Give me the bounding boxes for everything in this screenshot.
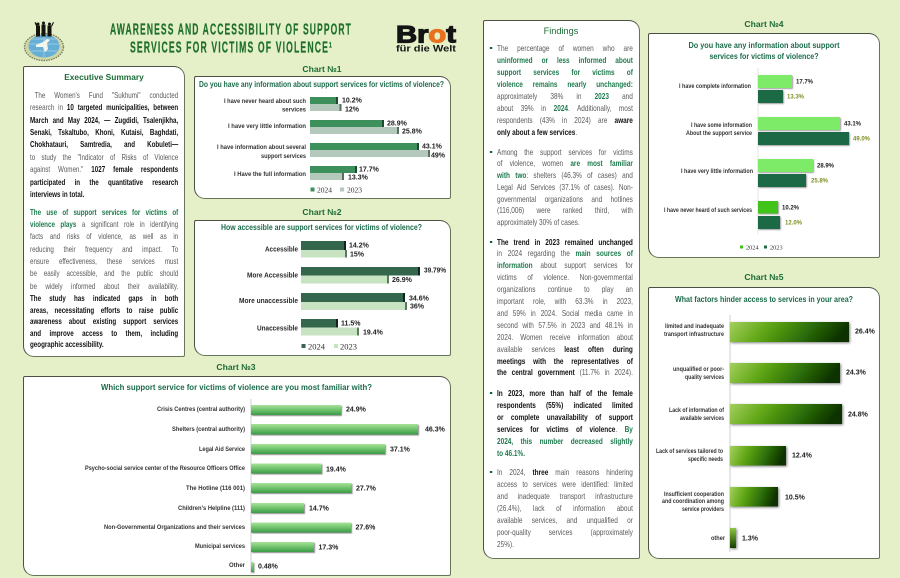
values: chart 1: 49% — [431, 153, 446, 160]
text: study gaps: areas, necessitating efforts to raise public — [30, 306, 178, 315]
category labels: chart 3: The Hotline (116 001) — [186, 486, 245, 492]
text: study gaps: geographic accessibility. — [30, 340, 104, 349]
category labels: chart 3: Legal Aid Service — [199, 447, 246, 453]
finding 2 — [490, 148, 633, 227]
category labels: chart 4: About the support service — [686, 131, 753, 137]
text: introduction: Chokhatauri, Samtredia, and Kobuleti— — [30, 140, 178, 149]
finding 3: available services least often during — [497, 345, 633, 354]
finding 1: support services for victims of — [497, 68, 633, 76]
panel: chart 1 — [194, 76, 451, 199]
panel: chart 4 — [648, 33, 880, 258]
heading: chart 3: Chart №3 — [216, 362, 256, 372]
category labels: chart 3: Shelters (central authority) — [172, 427, 245, 433]
values: chart 1 — [342, 98, 446, 182]
values: chart 5: 10.5% — [785, 495, 806, 502]
values: chart 2: 11.5% — [341, 320, 361, 328]
panel: chart 2 — [194, 220, 451, 356]
values: chart 3: 0.48% — [258, 564, 279, 571]
category labels: chart 5: available services — [680, 416, 725, 422]
values: chart 5: 24.3% — [846, 370, 867, 377]
category labels: chart 5: specific needs — [688, 457, 724, 463]
values: chart 5: 1.3% — [742, 536, 759, 543]
values: chart 3: 27.7% — [356, 486, 377, 493]
legend: chart 2: 2023 — [340, 342, 357, 352]
category labels: chart 3: Psycho-social service center of the Resource Officers Office — [85, 466, 246, 472]
logo: Brot für die Welt: Brot — [396, 22, 456, 48]
values: chart 4: 10.2% — [782, 205, 800, 211]
text: study gaps: and improve access to them, including — [30, 329, 178, 338]
legend: chart 4: 2024 — [746, 244, 759, 251]
category labels: chart 2: More Accessible — [247, 270, 298, 280]
finding 4: services for victims of violence. By — [497, 424, 633, 434]
values: chart 3: 17.3% — [318, 545, 339, 552]
text: introduction: against Women." 1027 female respondents — [30, 165, 178, 174]
text: use of support services: facts and risks of violence, as well as in — [30, 232, 178, 241]
finding 4: In 2023, more than half of the female — [497, 388, 633, 398]
category labels: chart 1: services — [282, 107, 307, 113]
values: chart 1: 10.2% — [342, 98, 363, 105]
panel: chart 3 — [23, 376, 451, 576]
category labels: chart 1: I Have the full information — [234, 172, 306, 178]
finding 1: uninformed or less informed about — [497, 56, 633, 64]
finding 1: only about a few services. — [497, 128, 577, 136]
legend: chart 1: 2023 — [347, 186, 362, 194]
finding 5: available services, and unqualified or — [497, 516, 633, 524]
values: chart 1: 13.3% — [348, 175, 369, 182]
legend: chart 2: 2024 — [308, 342, 326, 352]
category labels: chart 5: Insufficient cooperation — [664, 492, 724, 498]
text: use of support services: The use of support services for victims of — [30, 208, 178, 217]
values: chart 1: 43.1% — [422, 144, 443, 151]
finding 4 — [490, 388, 633, 458]
finding 3: meetings with the representatives of — [497, 357, 633, 366]
finding 3: important role, with 63.3% in 2023, — [497, 297, 633, 306]
values: chart 5: 26.4% — [855, 329, 876, 336]
category labels: chart 1: support services — [261, 154, 307, 160]
finding 5: (26.4%), lack of information about — [497, 504, 633, 512]
panel: chart 5: What factors hinder access to services in your area? — [675, 295, 853, 304]
heading: chart 2: Chart №2 — [302, 207, 342, 217]
category labels: chart 3: Non-Governmental Organizations and their services — [104, 525, 246, 531]
values: chart 4: 49.0% — [853, 136, 871, 142]
bars: chart 4 — [758, 75, 849, 229]
panel: chart 5 — [648, 287, 880, 559]
values: chart 3: 46.3% — [425, 427, 446, 434]
heading: executive summary: Executive Summary — [64, 72, 144, 82]
finding 1: approximately 38% in 2023 and — [497, 92, 633, 100]
panel: chart 4: services for victims of violence? — [710, 52, 819, 61]
values: chart 4: 43.1% — [844, 121, 862, 127]
values: chart 2: 39.79% — [424, 268, 447, 274]
values: chart 2: 15% — [350, 252, 365, 258]
finding 1 — [490, 44, 633, 136]
values: chart 2: 19.4% — [363, 330, 384, 336]
finding 5: access to services were identified: limited — [497, 480, 633, 488]
category labels: chart 5: other — [711, 536, 726, 542]
finding 1: about 39% in 2024. Additionally, most — [497, 104, 633, 112]
text: use of support services: violence plays a significant role in identifying — [30, 220, 178, 229]
bars: chart 1 — [310, 97, 430, 180]
finding 5: poor-quality services (approximately — [497, 528, 633, 536]
category labels: chart 5: Lack of information of — [669, 408, 725, 414]
finding 3: The trend in 2023 remained unchanged — [497, 238, 633, 246]
finding 5 — [490, 468, 633, 548]
category labels: chart 4 — [664, 84, 753, 214]
panel: chart 1: Do you have any information about support services for victims of violence? — [199, 80, 444, 89]
heading: findings: Findings — [544, 26, 578, 36]
values: chart 4: 25.8% — [811, 178, 829, 184]
values: chart 4: 12.0% — [785, 220, 803, 226]
values: chart 4: 17.7% — [796, 79, 814, 85]
finding 5: 25%). — [497, 540, 514, 548]
text: study gaps: The study has indicated gaps in both — [30, 294, 178, 303]
bars: chart 2 — [301, 241, 420, 336]
values: chart 3: 19.4% — [326, 467, 347, 474]
values: chart 1: 12% — [345, 107, 360, 114]
values: chart 5 — [742, 329, 876, 543]
finding 1: respondents (43% in 2024) are aware — [497, 116, 633, 124]
legend: chart 4 — [740, 244, 783, 251]
text: use of support services: ensure effectiveness, these services must — [30, 257, 178, 266]
category labels: chart 5 — [656, 324, 726, 542]
legend: chart 4: 2023 — [770, 244, 783, 251]
category labels: chart 1: I have never heard about such — [224, 99, 306, 105]
finding 4: 2024, this number decreased slightly — [497, 436, 633, 446]
values: chart 2: 14.2% — [349, 242, 370, 250]
values: chart 2: 36% — [410, 304, 425, 310]
text: study gaps: awareness about existing support services — [30, 317, 178, 326]
finding 5: and inadequate transport infrastructure — [497, 492, 633, 500]
finding 3: in 2024 regarding the main sources of — [497, 249, 633, 258]
heading: chart 4: Chart №4 — [744, 19, 784, 29]
text: use of support services: reducing their frequency and impact. To — [30, 245, 178, 254]
title — [110, 22, 352, 56]
category labels: chart 1 — [217, 99, 307, 178]
finding 3: 2024. Women receive information about — [497, 333, 633, 342]
text: introduction: interviews in total. — [30, 190, 84, 199]
finding 4: or complete unavailability of support — [497, 412, 633, 422]
text: introduction: The Women's Fund "Sukhumi" conducted — [35, 91, 178, 100]
finding 3 — [490, 238, 633, 377]
finding 2: (116,006) were ranked third, with — [497, 206, 633, 215]
values: chart 3: 37.1% — [390, 447, 411, 454]
finding 3: second with 57.5% in 2023 and 48.1% in — [497, 321, 633, 330]
category labels: chart 3 — [85, 407, 246, 569]
legend: chart 1: 2024 — [317, 186, 332, 194]
category labels: chart 2: Accessible — [265, 244, 298, 254]
category labels: chart 3: Municipal services — [195, 544, 246, 550]
finding 1: The percentage of women who are — [497, 44, 633, 52]
text: introduction: to study the "Indicator of Risks of Violence — [30, 153, 178, 162]
finding 2: Among the support services for victims — [497, 148, 633, 156]
category labels: chart 2 — [239, 244, 298, 332]
category labels: chart 4: I have very little information — [681, 169, 753, 175]
values: chart 4 — [782, 79, 871, 226]
bars: chart 5 — [730, 322, 849, 548]
values: chart 1: 17.7% — [359, 167, 380, 174]
category labels: chart 2: Unaccessible — [257, 324, 298, 332]
logo: Brot für die Welt: für die Welt — [396, 44, 456, 54]
values: chart 3: 27.6% — [356, 525, 376, 532]
legend: chart 2 — [302, 342, 357, 352]
category labels: chart 5: and coordination among — [662, 499, 724, 505]
values: chart 4: 28.9% — [817, 163, 835, 169]
finding 3: and 59% in 2024. Social media came in — [497, 309, 633, 318]
finding 2: with two: shelters (46.3% of cases) and — [497, 171, 633, 180]
category labels: chart 3: Children's Helpline (111) — [178, 506, 245, 512]
values: chart 1: 25.8% — [402, 129, 423, 136]
values: chart 5: 12.4% — [792, 453, 813, 460]
legend: chart 1 — [310, 186, 362, 194]
text: introduction: Senaki, Tskaltubo, Khoni, Kutaisi, Baghdati, — [30, 128, 178, 137]
panel: chart 3: Which support service for victims of violence are you most familiar with? — [101, 383, 372, 392]
category labels: chart 4: I have never heard of such services — [664, 208, 753, 214]
logo: Women's Fund Sukhumi — [24, 22, 64, 62]
text: introduction: March and May 2024, — Zugdidi, Tsalenjikha, — [30, 116, 178, 125]
text: use of support services: be widely informed about their availability. — [30, 282, 178, 291]
finding 3: information about support services for — [497, 261, 633, 270]
text: study gaps — [30, 294, 178, 349]
category labels: chart 2: More unaccessible — [239, 296, 298, 305]
text: introduction: participated in the quantitative research — [30, 178, 178, 187]
finding 2: governmental organizations and hotlines — [497, 195, 633, 204]
panel: executive summary — [23, 66, 185, 357]
category labels: chart 5: service providers — [682, 507, 725, 513]
category labels: chart 5: unqualified or poor- — [673, 367, 724, 373]
values: chart 4: 13.3% — [787, 94, 805, 100]
values: chart 3: 14.7% — [309, 506, 330, 513]
bars: chart 3 — [251, 405, 418, 572]
text: use of support services — [30, 208, 178, 291]
values: chart 5: 24.8% — [848, 412, 869, 419]
values: chart 3: 24.9% — [346, 407, 367, 414]
text: use of support services: be easily accessible, and the public should — [30, 269, 178, 278]
finding 2: Legal Aid Services (37.1% of cases). Non- — [497, 183, 633, 192]
category labels: chart 5: limited and inadequate — [665, 324, 725, 330]
finding 3: victims of violence. Non-governmental — [497, 273, 633, 282]
values: chart 3 — [258, 407, 446, 571]
category labels: chart 1: I have information about several — [217, 145, 306, 151]
finding 2: of violence, women are most familiar — [497, 159, 633, 168]
category labels: chart 5: Lack of services tailored to — [656, 449, 723, 455]
category labels: chart 1: I have very little information — [228, 124, 306, 130]
text: introduction: research in 10 targeted municipalities, between — [30, 103, 178, 112]
finding 1: violence remains nearly unchanged: — [497, 80, 633, 88]
category labels: chart 5: quality services — [685, 375, 725, 381]
finding 2: approximately 30% of cases. — [497, 218, 580, 227]
panel: findings — [483, 20, 640, 559]
finding 4: respondents (55%) indicated limited — [497, 400, 633, 410]
panel: chart 2: How accessible are support services for victims of violence? — [221, 223, 422, 232]
category labels: chart 3: Crisis Centres (central authority) — [157, 407, 245, 413]
finding 3: the central government (11.7% in 2024). — [497, 368, 633, 377]
category labels: chart 5: transport infrastructure — [664, 332, 725, 338]
text: introduction — [30, 91, 178, 199]
finding 5: In 2024, three main reasons hindering — [497, 468, 633, 476]
heading: chart 1: Chart №1 — [302, 64, 342, 74]
values: chart 2 — [341, 242, 447, 336]
heading: chart 5: Chart №5 — [744, 272, 784, 282]
values: chart 2: 26.9% — [392, 277, 413, 284]
finding 3: organizations continue to play an — [497, 285, 633, 294]
category labels: chart 4: I have complete information — [679, 84, 751, 90]
category labels: chart 4: I have some information — [691, 123, 752, 129]
values: chart 1: 28.9% — [387, 121, 408, 128]
panel: chart 4: Do you have any information about support — [688, 41, 840, 50]
category labels: chart 3: Other — [229, 563, 246, 569]
values: chart 2: 34.6% — [409, 296, 430, 302]
finding 4: to 46.1%. — [497, 448, 525, 458]
